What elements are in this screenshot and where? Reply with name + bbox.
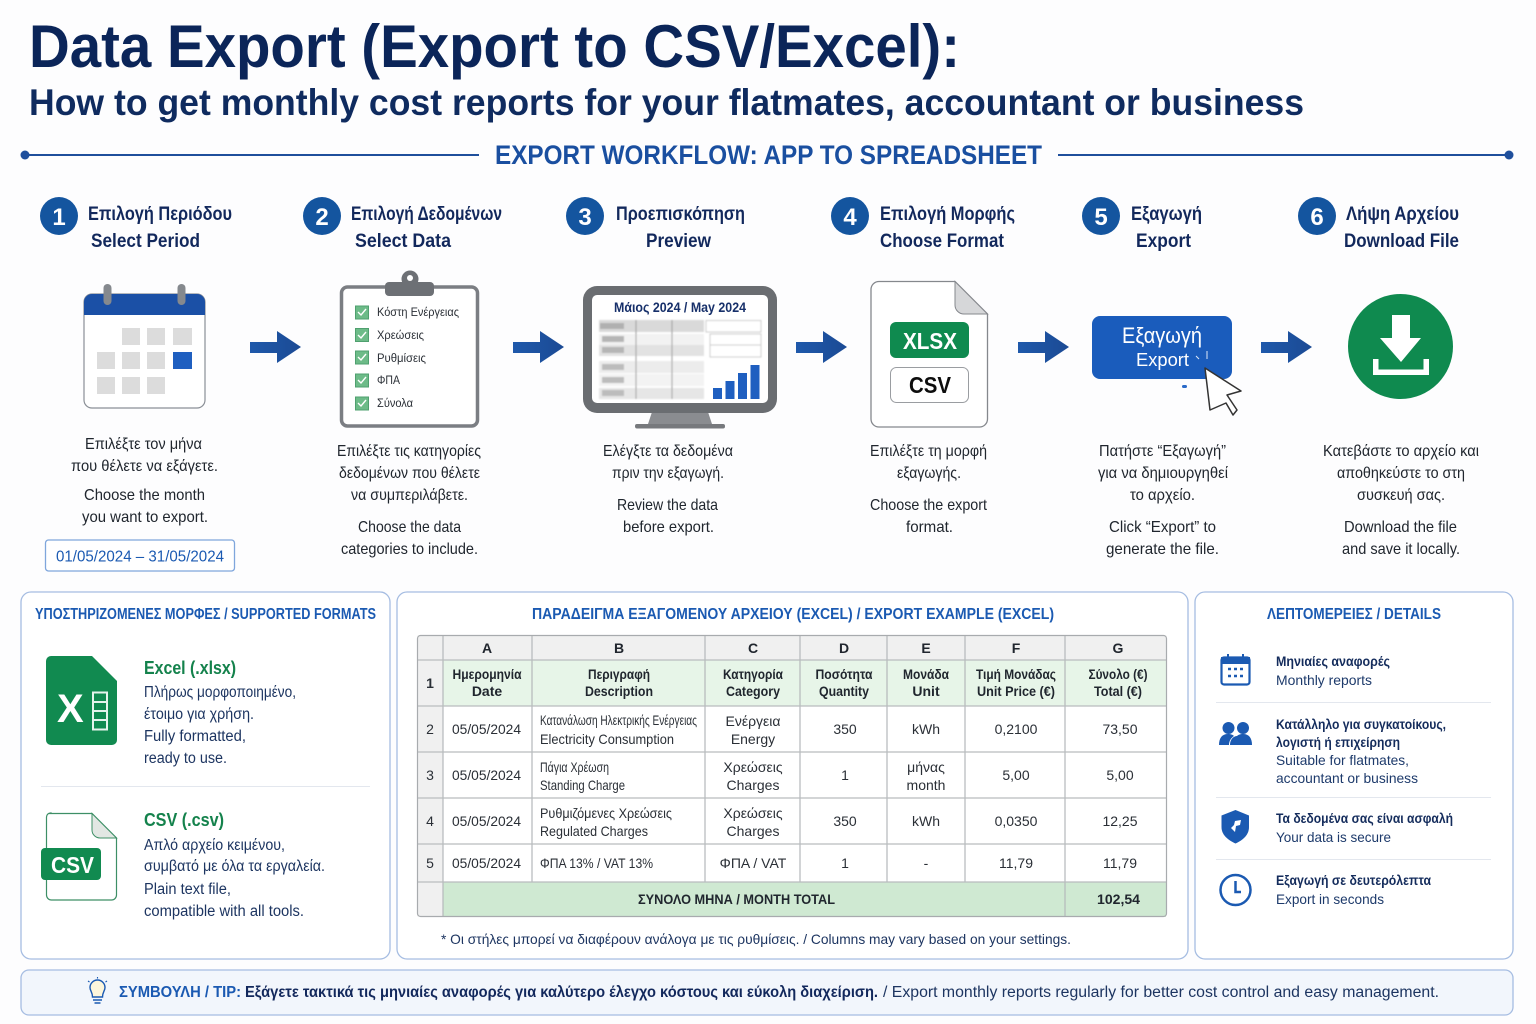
spreadsheet table bbox=[418, 636, 1166, 917]
row 5: ΦΠΑ 13% / VAT 13% bbox=[540, 855, 653, 871]
step 1 badge bbox=[40, 197, 78, 235]
row 5 bbox=[426, 855, 1137, 871]
step 4 heading: Επιλογή Μορφής bbox=[880, 204, 1015, 225]
step 6 badge bbox=[1298, 197, 1336, 235]
step 6: download file bbox=[1298, 197, 1479, 558]
step 1 heading bbox=[88, 204, 232, 252]
column letters: E bbox=[921, 640, 931, 656]
row 2: Ενέργεια bbox=[726, 713, 780, 729]
row 5: ΦΠΑ / VAT bbox=[720, 855, 787, 871]
step 5 badge bbox=[1082, 197, 1120, 235]
step 1 badge: 1 bbox=[52, 204, 66, 231]
date range box bbox=[46, 540, 234, 571]
column letters: G bbox=[1113, 640, 1124, 656]
step 2 heading: Επιλογή Δεδομένων bbox=[351, 204, 502, 225]
header row: Date bbox=[472, 683, 502, 699]
row 5: 1 bbox=[841, 855, 849, 871]
header row: Quantity bbox=[819, 683, 869, 699]
step 3 description: πριν την εξαγωγή. bbox=[612, 465, 724, 482]
step 6 description bbox=[1323, 443, 1479, 558]
header row: 1 bbox=[426, 675, 434, 691]
step 5 description: για να δημιουργηθεί bbox=[1098, 465, 1228, 482]
tip bar bbox=[21, 970, 1513, 1015]
arrow 3 bbox=[796, 331, 847, 363]
step 3 badge bbox=[566, 197, 604, 235]
tip text bbox=[119, 984, 1439, 1001]
row 3: 5,00 bbox=[1106, 767, 1134, 783]
icon: export button with cursor bbox=[1092, 316, 1241, 415]
header row: Category bbox=[726, 683, 780, 699]
row 4: Χρεώσεις bbox=[723, 805, 783, 821]
step 4 description bbox=[870, 443, 987, 536]
row 5: 05/05/2024 bbox=[452, 855, 521, 871]
row 3: 1 bbox=[841, 767, 849, 783]
arrow 4 bbox=[1018, 331, 1069, 363]
row 5: 5 bbox=[426, 855, 434, 871]
icon: monitor preview: Μάιος 2024 / May 2024 bbox=[614, 299, 746, 315]
excel format text bbox=[144, 658, 296, 767]
csv format text: CSV (.csv) bbox=[144, 810, 224, 830]
month total row: ΣΥΝΟΛΟ ΜΗΝΑ / MONTH TOTAL bbox=[638, 891, 835, 907]
icon: clipboard checklist: Χρεώσεις bbox=[377, 328, 424, 342]
export example heading: ΠΑΡΑΔΕΙΓΜΑ ΕΞΑΓΟΜΕΝΟΥ ΑΡΧΕΙΟΥ (EXCEL) / EXPORT EXAMPLE (EXCEL) bbox=[532, 606, 1054, 623]
icon: people bbox=[1219, 722, 1252, 745]
step 3 description: before export. bbox=[623, 519, 714, 536]
row 2: 73,50 bbox=[1102, 721, 1138, 737]
csv format text: Απλό αρχείο κειμένου, bbox=[144, 837, 285, 854]
row 2: 350 bbox=[833, 721, 857, 737]
step 5 badge: 5 bbox=[1094, 204, 1108, 231]
step 6 description: συσκευή σας. bbox=[1357, 487, 1445, 504]
header row: Σύνολο (€) bbox=[1088, 666, 1148, 682]
icon: clipboard checklist: Κόστη Ενέργειας bbox=[377, 305, 459, 319]
arrow 2 bbox=[513, 331, 564, 363]
arrow 1 bbox=[250, 331, 301, 363]
icon: light bulb bbox=[88, 977, 107, 1003]
excel format text: έτοιμο για χρήση. bbox=[144, 706, 254, 723]
step 6 heading: Download File bbox=[1344, 231, 1459, 252]
month total row: 102,54 bbox=[1097, 891, 1140, 907]
step 2 description: Επιλέξτε τις κατηγορίες bbox=[337, 443, 481, 460]
row 3 bbox=[426, 759, 1134, 793]
icon: excel file bbox=[46, 656, 117, 745]
step 2 description: categories to include. bbox=[341, 541, 478, 558]
row 2: 2 bbox=[426, 721, 434, 737]
step 3 heading: Προεπισκόπηση bbox=[616, 204, 745, 225]
excel format text: Excel (.xlsx) bbox=[144, 658, 236, 678]
step 1 description bbox=[71, 436, 218, 526]
row 3: Charges bbox=[727, 777, 779, 793]
icon: clock bbox=[1220, 875, 1250, 905]
row 4: Ρυθμιζόμενες Χρεώσεις bbox=[540, 805, 672, 821]
row 2: 05/05/2024 bbox=[452, 721, 521, 737]
column letters: D bbox=[839, 640, 849, 656]
row 5: 11,79 bbox=[1103, 855, 1137, 871]
step 2 description: να συμπεριλάβετε. bbox=[351, 487, 468, 504]
export in seconds text: Export in seconds bbox=[1276, 891, 1384, 907]
header row: Μονάδα bbox=[903, 666, 949, 682]
header row: Unit Price (€) bbox=[977, 683, 1055, 699]
suitable for text bbox=[1276, 716, 1446, 786]
step 1 heading: Επιλογή Περιόδου bbox=[88, 204, 232, 225]
row 2: Electricity Consumption bbox=[540, 731, 674, 747]
step 5 heading: Export bbox=[1136, 231, 1192, 252]
title bbox=[29, 13, 1304, 123]
icon: clipboard checklist: ΦΠΑ bbox=[377, 373, 400, 387]
tip text: Εξάγετε τακτικά τις μηνιαίες αναφορές για καλύτερο έλεγχο κόστους και εύκολη διαχείριση. bbox=[245, 984, 878, 1001]
step 4 description: Επιλέξτε τη μορφή bbox=[870, 443, 987, 460]
step 2 badge bbox=[303, 197, 341, 235]
column letters: C bbox=[748, 640, 758, 656]
step 4 badge: 4 bbox=[843, 204, 857, 231]
row 4: 12,25 bbox=[1102, 813, 1138, 829]
step 6 badge: 6 bbox=[1310, 204, 1324, 231]
suitable for text: λογιστή ή επιχείρηση bbox=[1276, 734, 1400, 750]
csv format text: compatible with all tools. bbox=[144, 903, 304, 920]
monthly reports text: Monthly reports bbox=[1276, 672, 1372, 688]
row 4: 4 bbox=[426, 813, 434, 829]
step 3 description: Review the data bbox=[617, 497, 718, 514]
row 3: Standing Charge bbox=[540, 777, 625, 793]
header row: Τιμή Μονάδας bbox=[976, 666, 1056, 682]
step 5 description: Click “Export” to bbox=[1109, 519, 1216, 536]
icon: calendar small bbox=[1221, 654, 1250, 684]
row 2 bbox=[426, 712, 1138, 747]
icon: file with format options bbox=[871, 282, 988, 427]
suitable for text: Suitable for flatmates, bbox=[1276, 752, 1409, 768]
icon: export button with cursor: Εξαγωγή bbox=[1122, 323, 1202, 348]
header row: Unit bbox=[912, 683, 940, 699]
step 1: select period bbox=[40, 197, 234, 571]
step 2 description: Choose the data bbox=[358, 519, 461, 536]
column letters: A bbox=[482, 640, 492, 656]
panel: supported formats bbox=[21, 592, 390, 959]
monthly reports text bbox=[1276, 653, 1390, 688]
step 6 description: αποθηκεύστε το στη bbox=[1337, 465, 1465, 482]
row 3: 3 bbox=[426, 767, 434, 783]
step 6 heading: Λήψη Αρχείου bbox=[1346, 204, 1459, 225]
icon: download circle bbox=[1348, 294, 1453, 399]
step 5 description: Πατήστε “Εξαγωγή” bbox=[1099, 443, 1226, 460]
title: Data Export (Export to CSV/Excel): bbox=[29, 13, 960, 80]
row 5: - bbox=[924, 855, 929, 871]
suitable for text: accountant or business bbox=[1276, 770, 1418, 786]
row 3: Πάγια Χρέωση bbox=[540, 759, 609, 775]
row 2: Κατανάλωση Ηλεκτρικής Ενέργειας bbox=[540, 712, 697, 728]
step 2 description: δεδομένων που θέλετε bbox=[339, 465, 480, 482]
monthly reports text: Μηνιαίες αναφορές bbox=[1276, 653, 1390, 669]
step 3: preview bbox=[566, 197, 777, 536]
step 4 badge bbox=[831, 197, 869, 235]
step 2 badge: 2 bbox=[315, 204, 329, 231]
icon: csv file bbox=[41, 813, 116, 900]
step 4 heading bbox=[880, 204, 1015, 252]
step 5 description bbox=[1098, 443, 1228, 558]
step 4 description: εξαγωγής. bbox=[897, 465, 961, 482]
step 6 heading bbox=[1344, 204, 1459, 252]
column letters: B bbox=[614, 640, 624, 656]
step 1 description: you want to export. bbox=[82, 509, 208, 526]
step 4 description: format. bbox=[906, 519, 953, 536]
subtitle: How to get monthly cost reports for your flatmates, accountant or business bbox=[29, 82, 1304, 123]
row 4: 05/05/2024 bbox=[452, 813, 521, 829]
secure text bbox=[1276, 810, 1453, 845]
row 4 bbox=[426, 805, 1138, 839]
secure text: Your data is secure bbox=[1276, 829, 1391, 845]
icon: excel file: X bbox=[57, 687, 84, 731]
icon: calendar bbox=[84, 284, 205, 408]
icon: shield bbox=[1222, 810, 1249, 844]
step 3 heading bbox=[616, 204, 745, 252]
icon: clipboard checklist bbox=[342, 270, 478, 426]
row 2: 0,2100 bbox=[995, 721, 1038, 737]
header row: Total (€) bbox=[1094, 683, 1142, 699]
header row: Κατηγορία bbox=[723, 666, 783, 682]
row 4: Charges bbox=[727, 823, 779, 839]
row 4: kWh bbox=[912, 813, 940, 829]
section heading: export workflow bbox=[20, 140, 1514, 170]
header row: Ημερομηνία bbox=[452, 666, 522, 682]
supported formats heading: ΥΠΟΣΤΗΡΙΖΟΜΕΝΕΣ ΜΟΡΦΕΣ / SUPPORTED FORMATS bbox=[35, 606, 376, 623]
date range box: 01/05/2024 – 31/05/2024 bbox=[56, 548, 224, 566]
row 4: 350 bbox=[833, 813, 857, 829]
section heading: export workflow: EXPORT WORKFLOW: APP TO SPREADSHEET bbox=[495, 140, 1042, 170]
header row: Ποσότητα bbox=[816, 666, 873, 682]
row 2: kWh bbox=[912, 721, 940, 737]
step 5 heading: Εξαγωγή bbox=[1131, 204, 1202, 225]
row 4: Regulated Charges bbox=[540, 823, 648, 839]
csv format text: συμβατό με όλα τα εργαλεία. bbox=[144, 858, 325, 875]
icon: file with format options: CSV bbox=[909, 372, 952, 398]
icon: monitor preview bbox=[583, 286, 777, 428]
step 4: choose format bbox=[831, 197, 1015, 536]
step 5 heading bbox=[1131, 204, 1202, 252]
excel format text: Πλήρως μορφοποιημένο, bbox=[144, 684, 296, 701]
step 6 description: and save it locally. bbox=[1342, 541, 1460, 558]
step 3 badge: 3 bbox=[578, 204, 592, 231]
icon: clipboard checklist: Ρυθμίσεις bbox=[377, 351, 426, 365]
step 5 description: το αρχείο. bbox=[1130, 487, 1195, 504]
step 3 description bbox=[603, 443, 733, 536]
step 5: export bbox=[1082, 197, 1241, 558]
step 3 description: Ελέγξτε τα δεδομένα bbox=[603, 443, 733, 460]
panel: export example bbox=[397, 592, 1188, 959]
step 1 description: Choose the month bbox=[84, 487, 205, 504]
step 2 heading bbox=[351, 204, 502, 252]
tip text: / Export monthly reports regularly for better cost control and easy management. bbox=[883, 984, 1439, 1001]
row 3: μήνας bbox=[907, 759, 945, 775]
header row: Περιγραφή bbox=[588, 666, 650, 682]
step 1 heading: Select Period bbox=[91, 231, 200, 252]
step 2 description bbox=[337, 443, 481, 558]
arrow 5 bbox=[1261, 331, 1312, 363]
secure text: Τα δεδομένα σας είναι ασφαλή bbox=[1276, 810, 1453, 826]
header row bbox=[426, 666, 1148, 699]
row 4: 0,0350 bbox=[995, 813, 1038, 829]
tip text: ΣΥΜΒΟΥΛΗ / TIP: bbox=[119, 984, 241, 1001]
column letters bbox=[482, 640, 1124, 656]
step 2: select data bbox=[303, 197, 502, 558]
export in seconds text: Εξαγωγή σε δευτερόλεπτα bbox=[1276, 872, 1431, 888]
excel format text: Fully formatted, bbox=[144, 728, 246, 745]
step 2 heading: Select Data bbox=[355, 231, 451, 252]
icon: csv file: CSV bbox=[51, 852, 95, 878]
row 2: Energy bbox=[731, 731, 775, 747]
export in seconds text bbox=[1276, 872, 1431, 907]
step 6 description: Κατεβάστε το αρχείο και bbox=[1323, 443, 1479, 460]
header row: Description bbox=[585, 683, 653, 699]
icon: export button with cursor: Export bbox=[1136, 350, 1189, 370]
step 4 description: Choose the export bbox=[870, 497, 987, 514]
step 4 heading: Choose Format bbox=[880, 231, 1005, 252]
table footnote: * Οι στήλες μπορεί να διαφέρουν ανάλογα με τις ρυθμίσεις. / Columns may vary based on your settings. bbox=[441, 931, 1071, 947]
step 6 description: Download the file bbox=[1344, 519, 1457, 536]
row 5: 11,79 bbox=[999, 855, 1033, 871]
month total row bbox=[638, 891, 1140, 907]
csv format text bbox=[144, 810, 325, 920]
excel format text: ready to use. bbox=[144, 750, 227, 767]
suitable for text: Κατάλληλο για συγκατοίκους, bbox=[1276, 716, 1446, 732]
step 3 heading: Preview bbox=[646, 231, 711, 252]
step 1 description: Επιλέξτε τον μήνα bbox=[85, 436, 202, 453]
step 5 description: generate the file. bbox=[1106, 541, 1219, 558]
step 1 description: που θέλετε να εξάγετε. bbox=[71, 458, 218, 475]
icon: clipboard checklist: Σύνολα bbox=[377, 396, 413, 410]
row 3: 5,00 bbox=[1002, 767, 1030, 783]
csv format text: Plain text file, bbox=[144, 881, 231, 898]
panel: details bbox=[1195, 592, 1513, 959]
column letters: F bbox=[1012, 640, 1021, 656]
row 3: 05/05/2024 bbox=[452, 767, 521, 783]
row 3: Χρεώσεις bbox=[723, 759, 783, 775]
row 3: month bbox=[907, 777, 945, 793]
icon: file with format options: XLSX bbox=[903, 328, 958, 354]
details heading: ΛΕΠΤΟΜΕΡΕΙΕΣ / DETAILS bbox=[1267, 606, 1441, 623]
